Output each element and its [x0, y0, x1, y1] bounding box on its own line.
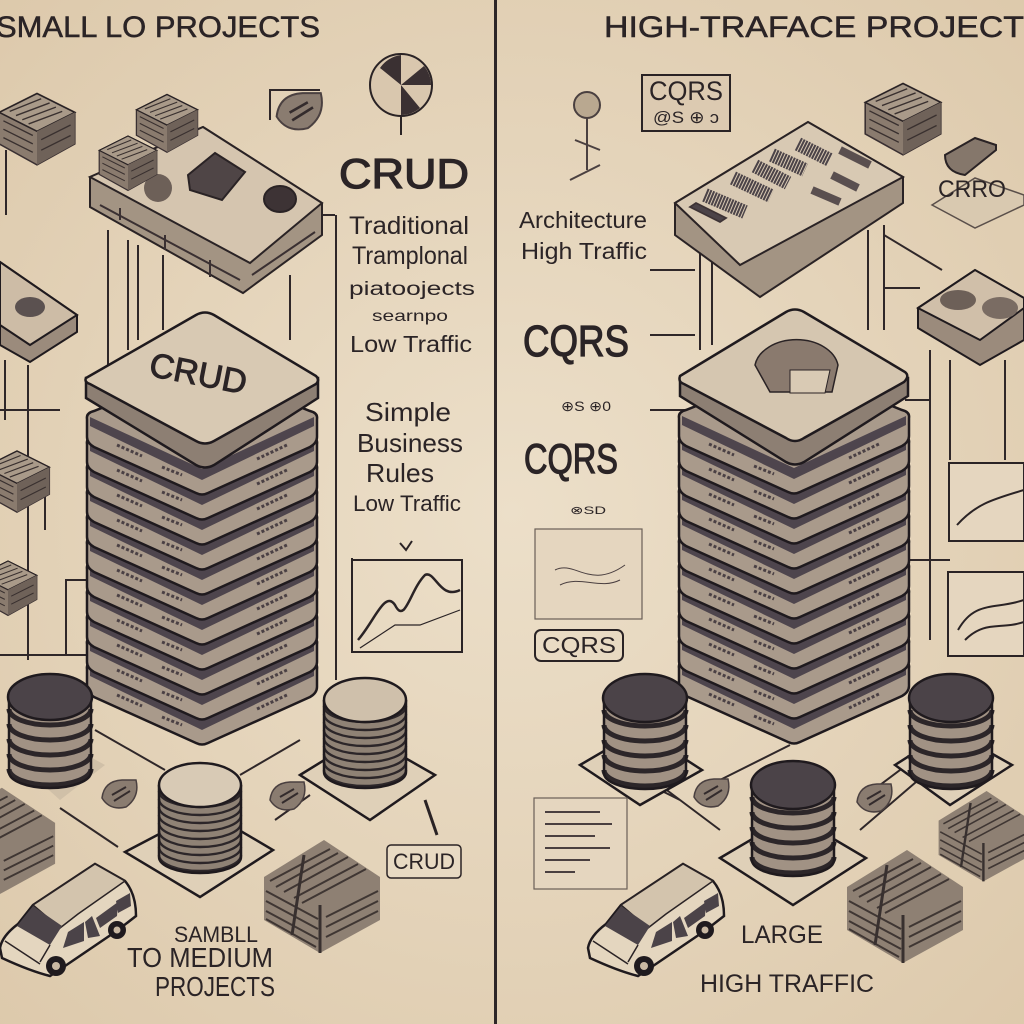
- text: CRUD description: Simple: [365, 397, 451, 427]
- text: small to medium projects: TO MEDIUM: [127, 942, 273, 973]
- notes card: [534, 798, 627, 889]
- label: CRUD tag: [387, 800, 461, 878]
- panel: small to medium projects: [0, 11, 475, 1002]
- right charts: [948, 463, 1024, 656]
- stack: CRUD: [86, 312, 318, 744]
- stack: CQRS: [679, 310, 909, 744]
- text: CRUD description: [339, 150, 475, 516]
- label: CQRS tag top: @S ⊕ ɔ: [653, 108, 719, 127]
- text: CQRS description: Architecture: [519, 207, 647, 233]
- database cylinders: [603, 674, 993, 876]
- callout: CRRD: CRRO: [938, 176, 1006, 203]
- text: large high traffic: [700, 921, 874, 998]
- text: CRUD description: Low Traffic: [350, 331, 472, 357]
- platform: side: [0, 262, 77, 362]
- text: large high traffic: LARGE: [741, 921, 823, 949]
- label: CQRS tag bottom: [535, 630, 623, 661]
- heading: small to medium projects: SMALL LO PROJECTS: [0, 11, 320, 44]
- text: CRUD description: Tramplonal: [352, 242, 468, 270]
- label: CRUD tag: CRUD: [393, 849, 455, 874]
- text: CQRS description: High Traffic: [521, 238, 647, 264]
- icon: van: [0, 864, 136, 976]
- text: CQRS description: CQRS: [524, 435, 618, 482]
- icon: server boxes: [0, 93, 380, 953]
- server boxes: [847, 84, 1024, 963]
- text: CRUD description: piatoojects: [349, 279, 475, 300]
- panel: high-traffic projects: [519, 11, 1024, 998]
- platform: CQRS top: [675, 122, 903, 297]
- text: CRUD description: CRUD: [339, 150, 469, 197]
- heading: high-traffic projects: HIGH-TRAFACE PROJECT: [604, 11, 1024, 44]
- text: CRUD description: Low Traffic: [353, 491, 461, 516]
- text: CRUD description: searnpo: [372, 308, 448, 325]
- text: CQRS description: CQRS: [523, 317, 629, 366]
- text: CQRS description: ⊕S ⊕0: [561, 398, 611, 414]
- label: CRUD on stack: CRUD: [146, 346, 250, 402]
- connector lines right: [620, 225, 1005, 830]
- cylinder bases: [10, 735, 435, 897]
- icons: small tags: [102, 780, 305, 810]
- icon: van: [588, 864, 724, 976]
- callout: CRRD: [932, 138, 1024, 228]
- text: CQRS description: [519, 207, 647, 517]
- text: small to medium projects: PROJECTS: [155, 971, 275, 1002]
- label: CQRS tag bottom: CQRS: [542, 632, 616, 658]
- platform: side right: [918, 270, 1024, 365]
- icons: small tags: [694, 779, 892, 812]
- text: CRUD description: Business: [357, 428, 463, 458]
- text: CRUD description: Traditional: [349, 212, 469, 240]
- cylinder bases: [580, 730, 1012, 905]
- label: CQRS tag top: [642, 75, 730, 131]
- text: CRUD description: Rules: [366, 458, 434, 488]
- chart: line chart: [352, 541, 462, 652]
- database cylinders: [8, 674, 406, 873]
- icon: dial: [370, 54, 432, 135]
- text: CQRS description: ⊗SD: [570, 505, 606, 517]
- text: large high traffic: HIGH TRAFFIC: [700, 970, 874, 998]
- label: CQRS tag top: CQRS: [649, 76, 723, 106]
- text: small to medium projects: SAMBLL: [174, 922, 258, 947]
- divider between panels: [494, 0, 497, 1024]
- icon: lightbulb: [570, 92, 600, 180]
- connector lines left: [0, 90, 336, 847]
- diagram card: [535, 529, 642, 619]
- platform: CRUD top: [90, 94, 322, 293]
- text: small to medium projects: [127, 922, 275, 1002]
- icon: stack top globe: [755, 340, 838, 393]
